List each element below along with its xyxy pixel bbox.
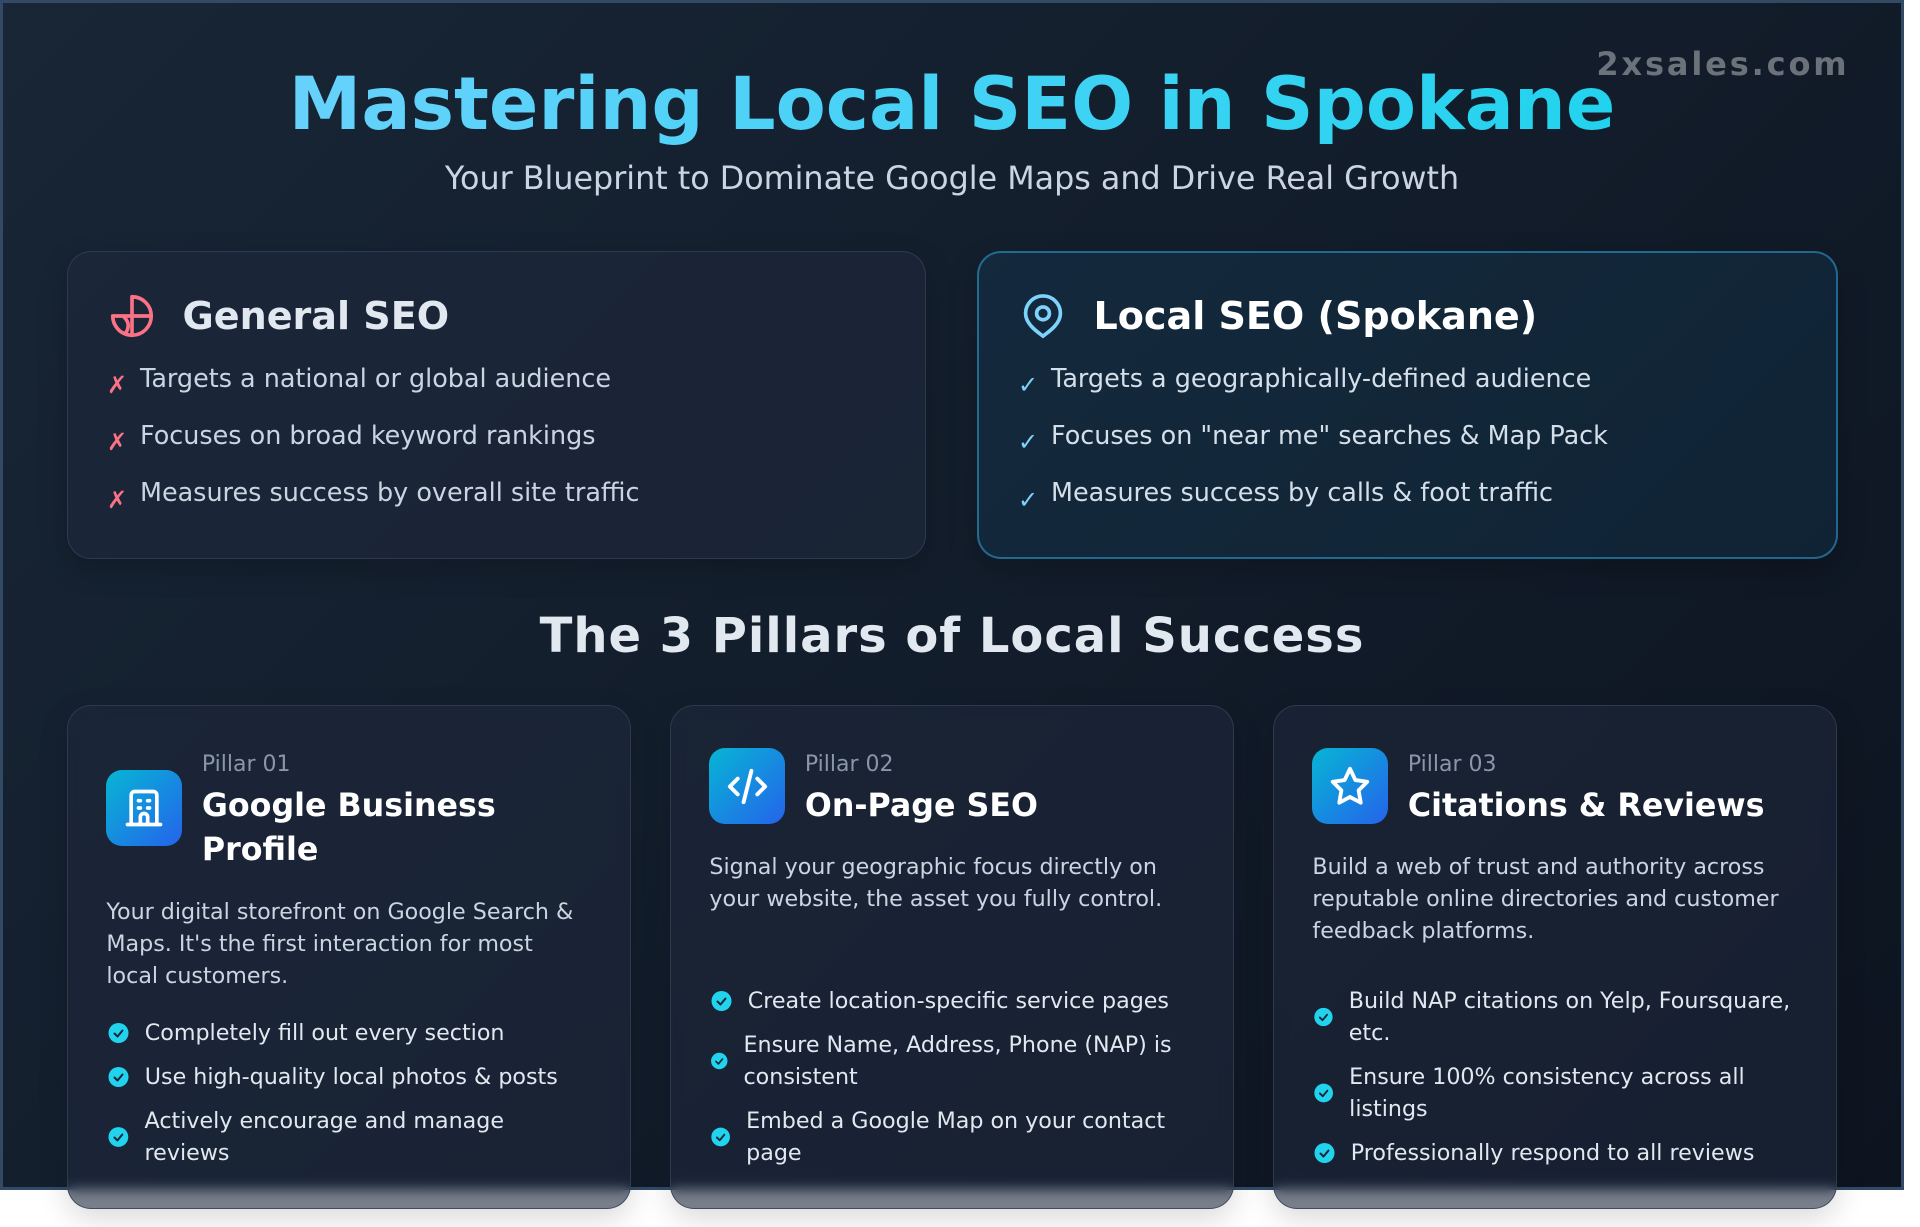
panel: general SEO [67, 251, 926, 559]
icon: code [709, 748, 785, 824]
list: local: ✓ [1018, 428, 1038, 456]
pillar header [709, 748, 1038, 824]
list: general: Focuses on broad keyword rankings [140, 421, 595, 451]
pillar title: Pillar 02 [805, 752, 894, 777]
list: general: ✗ [107, 371, 127, 399]
checklist [1314, 988, 1790, 1166]
icon: pie [110, 294, 154, 338]
heading: General SEO [182, 294, 449, 338]
list: local: Targets a geographically-defined audience [1051, 364, 1591, 394]
pillar title [1408, 752, 1764, 824]
pillar title [202, 752, 496, 868]
title: Mastering Local SEO in Spokane [289, 62, 1615, 146]
description: Your digital storefront on Google Search & Maps. It's the first interaction for most local customers. [106, 899, 573, 989]
checklist [711, 988, 1172, 1166]
pillar header [1312, 748, 1764, 824]
watermark: 2xsales.com [1596, 44, 1850, 82]
pillar title: Pillar 03 [1408, 752, 1497, 777]
panel: pillar 2 [670, 705, 1234, 1209]
panel: local SEO [977, 251, 1838, 559]
description: Signal your geographic focus directly on your website, the asset you fully control. [709, 854, 1162, 912]
checklist: Create location-specific service pages [748, 988, 1169, 1014]
checklist: Embed a Google Map on your contact page [746, 1108, 1165, 1166]
list: general: ✗ [107, 486, 127, 514]
checklist: Professionally respond to all reviews [1351, 1140, 1754, 1166]
list: local: Measures success by calls & foot traffic [1051, 478, 1553, 508]
icon: map pin [1024, 294, 1062, 338]
list: local: ✓ [1018, 486, 1038, 514]
pillar title: Citations & Reviews [1408, 788, 1764, 824]
checklist: Actively encourage and manage reviews [145, 1108, 504, 1166]
list: general: ✗ [107, 428, 127, 456]
section heading: The 3 Pillars of Local Success [540, 608, 1364, 664]
checklist: Build NAP citations on Yelp, Foursquare, etc. [1349, 988, 1790, 1046]
list: general [107, 364, 639, 514]
checklist: Use high-quality local photos & posts [145, 1064, 558, 1090]
icon: star [1312, 748, 1388, 824]
description: Build a web of trust and authority across reputable online directories and customer feedback platforms. [1312, 854, 1779, 944]
pillar title: Google Business Profile [202, 788, 496, 868]
checklist: Completely fill out every section [145, 1020, 504, 1046]
checklist: Ensure Name, Address, Phone (NAP) is consistent [743, 1032, 1172, 1090]
checklist: Ensure 100% consistency across all listings [1349, 1064, 1745, 1122]
list: local: Focuses on "near me" searches & Map Pack [1051, 421, 1608, 451]
pillar title [805, 752, 1038, 824]
pillar title: On-Page SEO [805, 788, 1038, 824]
list: local: ✓ [1018, 371, 1038, 399]
icon: building [106, 770, 182, 846]
pillar title: Pillar 01 [202, 752, 291, 777]
subtitle: Your Blueprint to Dominate Google Maps and Drive Real Growth [445, 160, 1459, 196]
list: local [1018, 364, 1608, 514]
pillar header [106, 752, 496, 868]
panel: pillar 3 [1273, 705, 1837, 1209]
list: general: Targets a national or global audience [140, 364, 611, 394]
heading: Local SEO (Spokane) [1094, 294, 1537, 338]
checklist [108, 1020, 558, 1166]
panel: pillar 1 [67, 705, 631, 1209]
list: general: Measures success by overall site traffic [140, 478, 639, 508]
